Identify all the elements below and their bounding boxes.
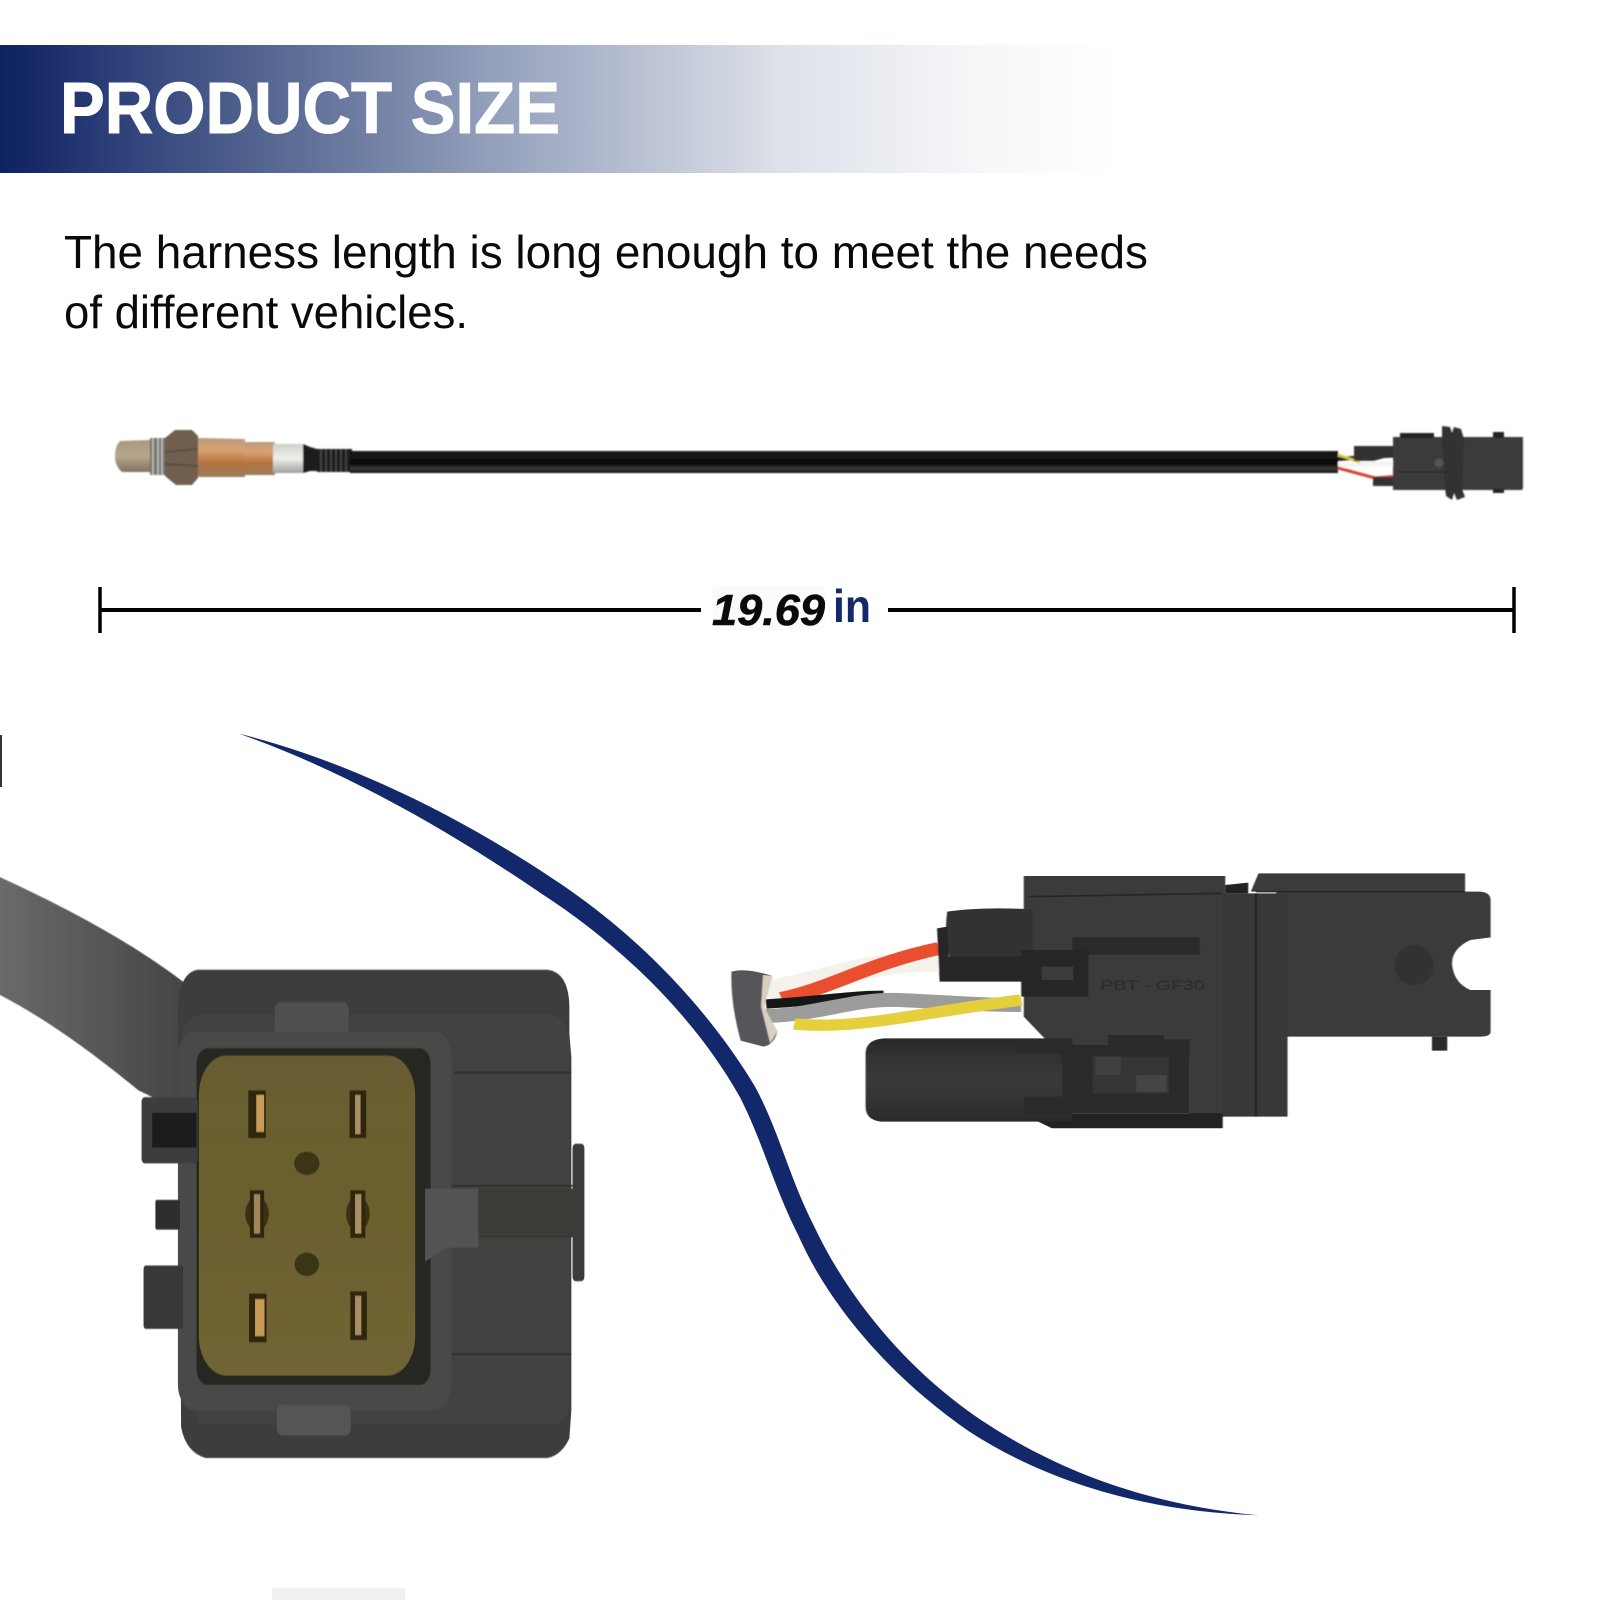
center flange	[1223, 893, 1288, 1117]
contact pins	[245, 1090, 370, 1342]
top key	[275, 1002, 349, 1042]
measurement value: in	[833, 580, 871, 632]
back housing	[178, 970, 571, 1458]
moulded marking: PBT - GF30	[1100, 978, 1205, 993]
left latch	[142, 1097, 198, 1163]
side tab	[573, 1144, 584, 1281]
large photo: connector side view with wires	[731, 873, 1491, 1128]
header banner	[0, 45, 1115, 173]
heading: product size: PRODUCT SIZE	[60, 69, 560, 149]
locating dimples	[294, 1152, 319, 1276]
large photo: six-pin connector front view	[0, 877, 584, 1458]
measurement value: 19.69	[712, 586, 826, 635]
sensor probe	[115, 430, 352, 485]
right housing	[1251, 873, 1491, 1037]
measurement value	[712, 580, 871, 635]
harness cable	[350, 451, 1338, 473]
upper housing	[1024, 876, 1225, 1117]
blue curved divider	[239, 734, 1258, 1515]
wire bundle	[766, 948, 1021, 1025]
retaining tab	[1432, 1037, 1447, 1051]
lower plug	[866, 1035, 1223, 1128]
side clip	[425, 1189, 478, 1262]
wire sleeve	[731, 970, 777, 1047]
collar	[178, 1031, 452, 1410]
edge artifact	[0, 735, 2, 787]
olive contact face	[199, 1056, 415, 1375]
description text: of different vehicles.	[64, 286, 468, 338]
thick cable	[0, 877, 186, 1113]
left small tabs	[144, 1200, 183, 1329]
dimension line	[100, 580, 1514, 635]
faint patch at bottom edge	[272, 1588, 405, 1600]
upper plug	[937, 908, 1089, 997]
product photo: full sensor with harness	[115, 426, 1523, 500]
bottom key	[277, 1405, 351, 1436]
description text: The harness length is long enough to meet the needs	[64, 226, 1148, 278]
description text	[64, 226, 1148, 338]
locating knob	[1395, 945, 1433, 985]
wiring connector	[1338, 426, 1523, 500]
